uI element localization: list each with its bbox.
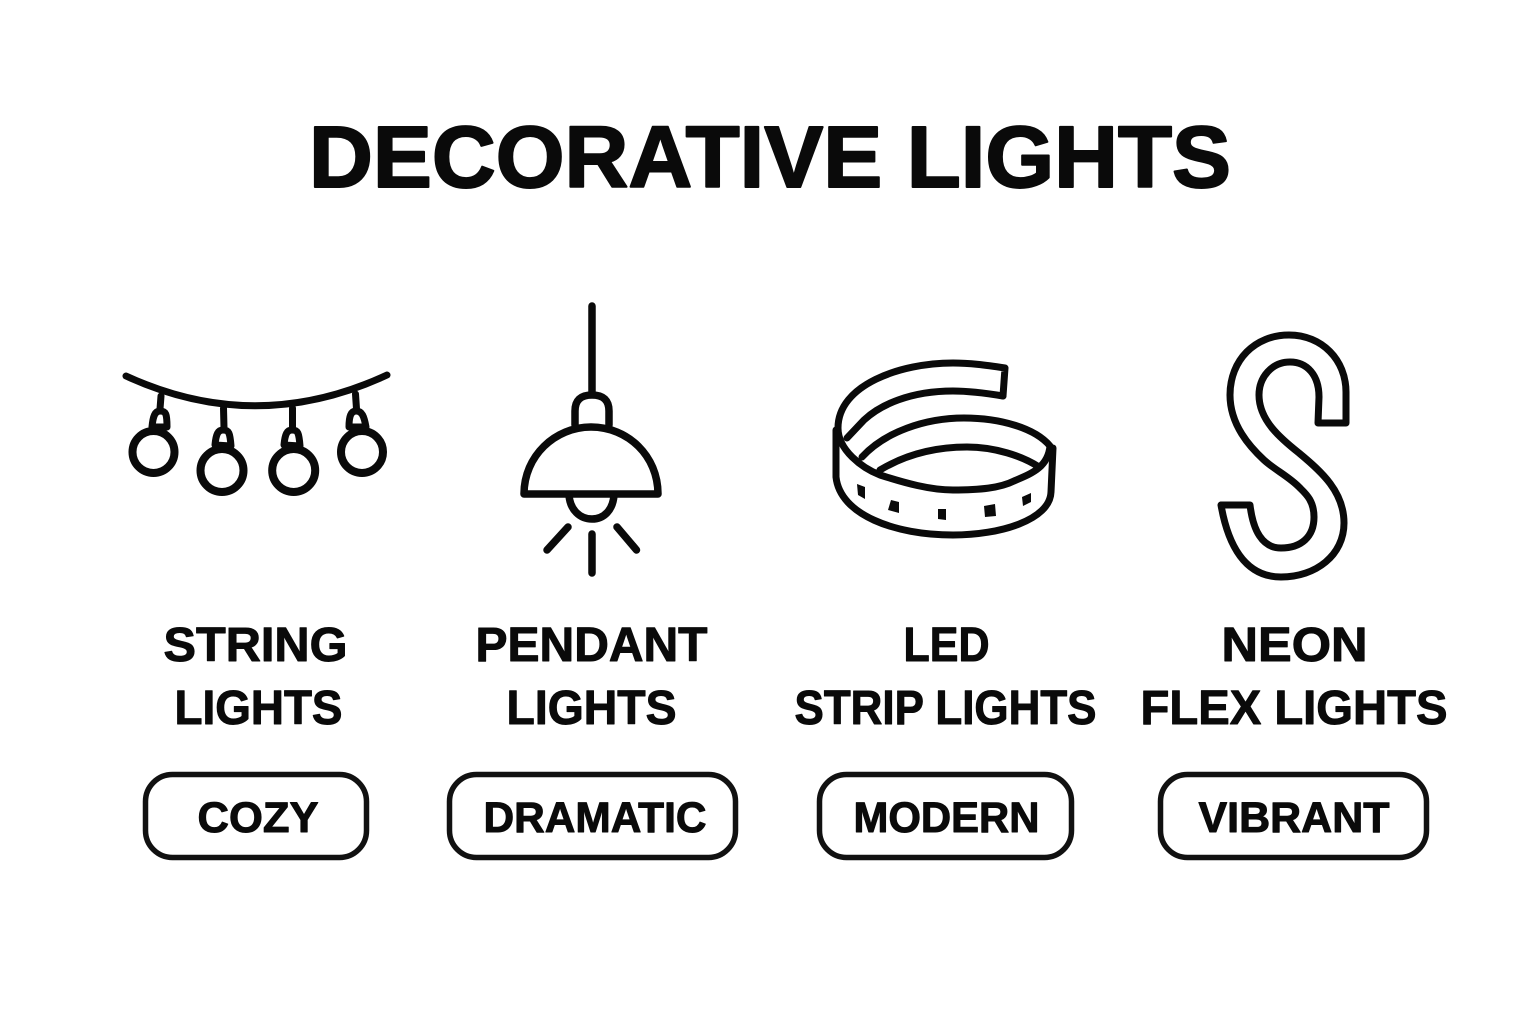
tag: cozy — [146, 774, 366, 858]
panel: neon flex lights — [1140, 335, 1448, 858]
icon: string lights — [126, 375, 387, 492]
label: LED strip lights: LED — [904, 619, 990, 672]
tag: cozy: COZY — [198, 794, 318, 842]
label: neon flex lights: FLEX LIGHTS — [1140, 682, 1448, 735]
LED dots — [857, 484, 1031, 520]
label: LED strip lights: STRIP LIGHTS — [794, 682, 1096, 735]
title: DECORATIVE LIGHTS — [309, 109, 1231, 206]
tag: modern: MODERN — [854, 794, 1040, 842]
tag: vibrant: VIBRANT — [1198, 794, 1390, 842]
tag: dramatic: DRAMATIC — [484, 794, 706, 842]
icon: pendant lamp — [524, 306, 658, 573]
tag: modern — [820, 774, 1072, 858]
icon: LED strip — [836, 363, 1053, 535]
panel: string lights — [126, 375, 387, 858]
tag: dramatic — [450, 774, 736, 858]
label: pendant lights: LIGHTS — [506, 682, 676, 735]
tag: vibrant — [1160, 774, 1426, 858]
panel: LED strip lights — [794, 363, 1096, 858]
label: string lights: LIGHTS — [174, 682, 342, 735]
icon: neon S tube — [1221, 335, 1346, 577]
label: neon flex lights: NEON — [1222, 619, 1368, 672]
label: pendant lights: PENDANT — [476, 619, 708, 672]
panel: pendant lights — [450, 306, 736, 858]
label: string lights: STRING — [164, 619, 348, 672]
